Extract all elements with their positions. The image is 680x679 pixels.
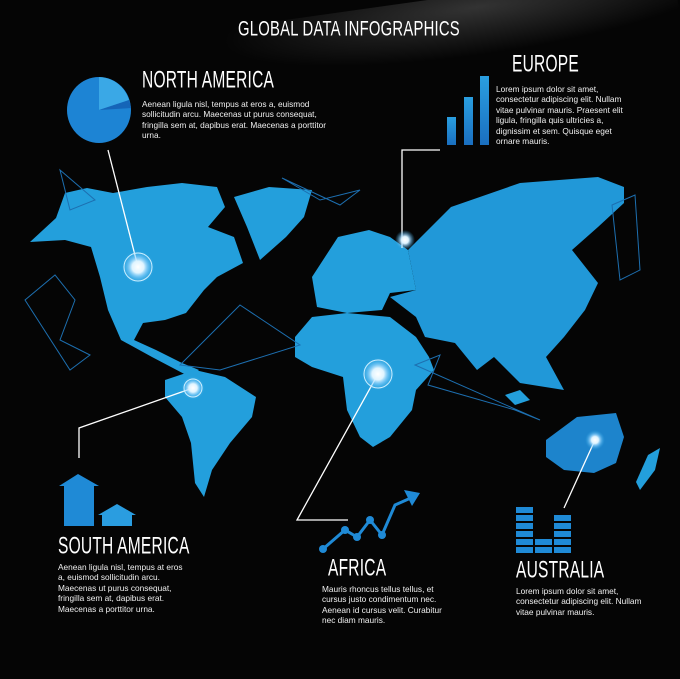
icon: pie chart bbox=[67, 77, 131, 143]
heading: australia: AUSTRALIA bbox=[516, 557, 604, 583]
continent: australia bbox=[546, 413, 624, 473]
continent: africa bbox=[295, 313, 434, 447]
text: australia: Lorem ipsum dolor sit amet, consectetur adipiscing elit. Nullam vitae pulvinar mauris. bbox=[516, 586, 641, 617]
text: africa: Mauris rhoncus tellus tellus, et cursus justo condimentum nec. Aenean id cursus velit. Curabitur nec diam mauris. bbox=[322, 584, 442, 625]
continent: asia bbox=[390, 177, 624, 390]
continent: north america bbox=[30, 183, 243, 377]
pointer lines bbox=[79, 150, 595, 520]
text: europe: Lorem ipsum dolor sit amet, consectetur adipiscing elit. Nullam vitae pulvinar mauris. Praesent elit ligula, fringilla quis ultricies a, dignissim et sem. Quisque eget ornare mauris. bbox=[496, 84, 623, 146]
heading: europe: EUROPE bbox=[512, 51, 579, 77]
title: GLOBAL DATA INFOGRAPHICS bbox=[238, 18, 460, 41]
icon: line chart arrow bbox=[319, 490, 420, 553]
text: north america: Aenean ligula nisl, tempus at eros a, euismod sollicitudin arcu. Maecenas ut purus consequat, fringilla sem at, dapibus erat. Maecenas a porttitor urna. bbox=[142, 99, 326, 140]
new zealand bbox=[636, 448, 660, 490]
continent: europe bbox=[312, 230, 416, 313]
continent: south america bbox=[165, 370, 256, 497]
glow markers bbox=[121, 230, 605, 450]
heading: north america: NORTH AMERICA bbox=[142, 67, 274, 93]
text: south america: Aenean ligula nisl, tempus at eros a, euismod sollicitudin arcu. Maecenas ut purus consequat, fringilla sem at, dapibus erat. Maecenas a porttitor urna. bbox=[58, 562, 183, 614]
icon: arrows up bbox=[59, 474, 136, 526]
icon: bar chart bbox=[447, 76, 489, 145]
heading: south america: SOUTH AMERICA bbox=[58, 533, 190, 559]
background glow bbox=[178, 0, 680, 104]
continent: greenland bbox=[234, 187, 312, 260]
heading: africa: AFRICA bbox=[328, 555, 386, 581]
icon: equalizer bbox=[516, 507, 571, 553]
